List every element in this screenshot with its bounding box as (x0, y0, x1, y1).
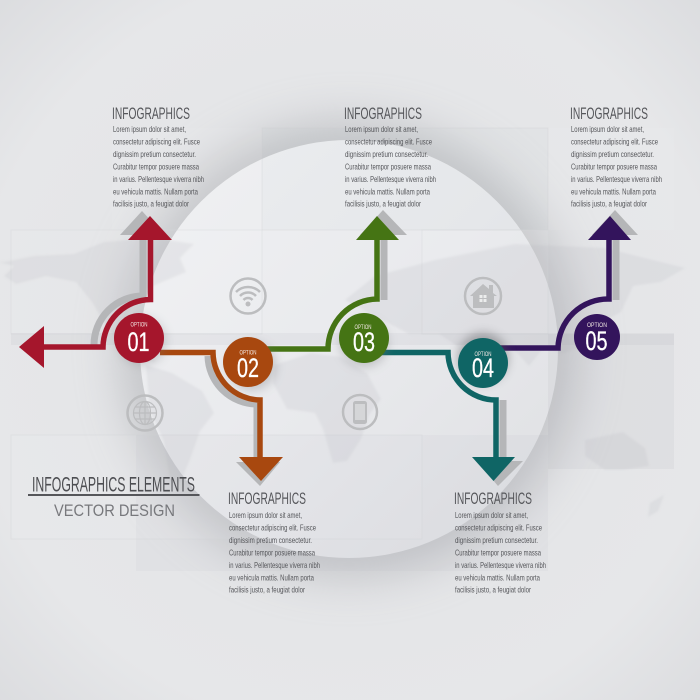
text block 02: Curabitur tempor posuere massa (229, 548, 315, 558)
icon: home (465, 278, 501, 314)
text block 03: in varius. Pellentesque viverra nibh (345, 174, 436, 184)
text block 01: Curabitur tempor posuere massa (113, 162, 199, 172)
text block 01: dignissim pretium consectetur. (113, 149, 196, 159)
option 02 badge (223, 337, 276, 390)
icon: globe (128, 396, 162, 430)
large circle shadow (119, 119, 579, 579)
world map (0, 238, 685, 517)
text block 04: Lorem ipsum dolor sit amet, (455, 510, 528, 520)
text block 05: facilisis justo, a feugiat dolor (571, 198, 647, 208)
arrow 03: green, up (265, 216, 399, 349)
text block 03: consectetur adipiscing elit. Fusce (345, 136, 432, 146)
option 01 badge: 01 (128, 327, 150, 357)
option 04 badge: OPTION (474, 352, 492, 358)
text block 01 (112, 104, 204, 208)
text block 03: eu vehicula mattis. Nullam porta (345, 186, 430, 196)
text block 04: INFOGRAPHICS (454, 489, 532, 508)
option 01 badge (114, 313, 166, 365)
arrow 01 shadow (94, 211, 164, 345)
arrow 05 shadow (592, 210, 638, 300)
arrow 01: red, up and left (19, 216, 172, 368)
large circle (140, 140, 558, 558)
text block 02: consectetur adipiscing elit. Fusce (229, 522, 316, 532)
text block 01: Lorem ipsum dolor sit amet, (113, 124, 186, 134)
text block 05: Lorem ipsum dolor sit amet, (571, 124, 644, 134)
text block 05: dignissim pretium consectetur. (571, 149, 654, 159)
arrow 02 shadow (208, 356, 280, 486)
title: INFOGRAPHICS ELEMENTS (32, 474, 195, 496)
option 05 badge (574, 314, 620, 360)
text block 04: dignissim pretium consectetur. (455, 535, 538, 545)
text block 03: INFOGRAPHICS (344, 104, 422, 123)
option 02 badge: 02 (237, 353, 259, 383)
icon: smartphone (343, 395, 377, 429)
text block 04: eu vehicula mattis. Nullam porta (455, 572, 540, 582)
arrow 03 shadow (360, 210, 407, 300)
text block 02: in varius. Pellentesque viverra nibh (229, 560, 320, 570)
text block 01: consectetur adipiscing elit. Fusce (113, 136, 200, 146)
text block 04: Curabitur tempor posuere massa (455, 548, 541, 558)
icon: wifi (230, 278, 266, 314)
text block 05: consectetur adipiscing elit. Fusce (571, 136, 658, 146)
text block 05: eu vehicula mattis. Nullam porta (571, 186, 656, 196)
option 04 badge: 04 (472, 353, 494, 383)
option 05 badge: 05 (586, 326, 608, 356)
option 02 badge: OPTION (240, 350, 256, 356)
text block 04: consectetur adipiscing elit. Fusce (455, 522, 542, 532)
text block 03: facilisis justo, a feugiat dolor (345, 198, 421, 208)
text block 01: in varius. Pellentesque viverra nibh (113, 174, 204, 184)
text block 02 (228, 489, 320, 594)
text block 03: Curabitur tempor posuere massa (345, 162, 431, 172)
text block 02: INFOGRAPHICS (228, 489, 306, 508)
option 03 badge (339, 313, 389, 367)
text block 02: Lorem ipsum dolor sit amet, (229, 510, 302, 520)
option 04 badge (458, 333, 508, 388)
text block 05 (570, 104, 662, 208)
text block 04: in varius. Pellentesque viverra nibh (455, 560, 546, 570)
option 01 badge: OPTION (130, 322, 148, 328)
arrow 04 shadow (477, 400, 523, 486)
text block 05: Curabitur tempor posuere massa (571, 162, 657, 172)
arrow 02: orange, down (160, 352, 283, 481)
text block 05: INFOGRAPHICS (570, 104, 648, 123)
option 03 badge: 03 (353, 327, 375, 357)
text block 02: dignissim pretium consectetur. (229, 535, 312, 545)
text block 04 (454, 489, 546, 594)
text block 04: facilisis justo, a feugiat dolor (455, 584, 531, 594)
text block 02: eu vehicula mattis. Nullam porta (229, 572, 314, 582)
title (28, 474, 200, 520)
text block 01: facilisis justo, a feugiat dolor (113, 198, 189, 208)
text block 02: facilisis justo, a feugiat dolor (229, 584, 305, 594)
background panels (11, 128, 674, 571)
option 05 badge: OPTION (587, 323, 607, 329)
text block 03: Lorem ipsum dolor sit amet, (345, 124, 418, 134)
title: VECTOR DESIGN (54, 501, 175, 520)
arrow 04: teal, down (380, 352, 515, 481)
option 03 badge: OPTION (354, 325, 372, 331)
arrow 05: purple, up (500, 216, 631, 348)
text block 01: eu vehicula mattis. Nullam porta (113, 186, 198, 196)
text block 03: dignissim pretium consectetur. (345, 149, 428, 159)
text block 01: INFOGRAPHICS (112, 104, 190, 123)
text block 03 (344, 104, 436, 208)
text block 05: in varius. Pellentesque viverra nibh (571, 174, 662, 184)
